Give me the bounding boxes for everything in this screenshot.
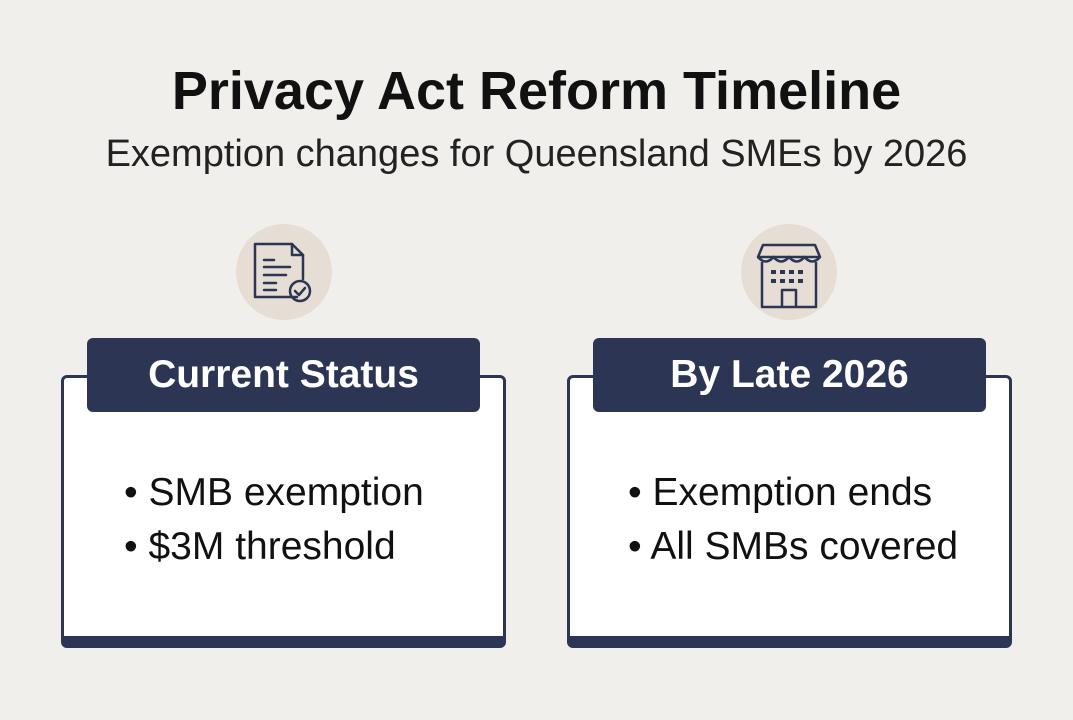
panel: current status bbox=[61, 375, 506, 648]
list: by late 2026: • Exemption ends bbox=[628, 471, 932, 514]
heading: by late 2026: By Late 2026 bbox=[670, 353, 909, 396]
heading: current status bbox=[87, 338, 480, 412]
title: Privacy Act Reform Timeline bbox=[172, 61, 901, 121]
icon: document check bbox=[236, 224, 332, 320]
list: current status: • $3M threshold bbox=[124, 525, 396, 568]
heading: current status: Current Status bbox=[148, 353, 419, 396]
heading: by late 2026 bbox=[593, 338, 986, 412]
list: current status: • SMB exemption bbox=[124, 471, 424, 514]
subtitle: Exemption changes for Queensland SMEs by 2026 bbox=[106, 133, 967, 175]
list: by late 2026: • All SMBs covered bbox=[628, 525, 958, 568]
icon: storefront bbox=[741, 224, 837, 320]
panel: by late 2026 bbox=[567, 375, 1012, 648]
list: current status bbox=[124, 471, 424, 568]
list: by late 2026 bbox=[628, 471, 958, 568]
